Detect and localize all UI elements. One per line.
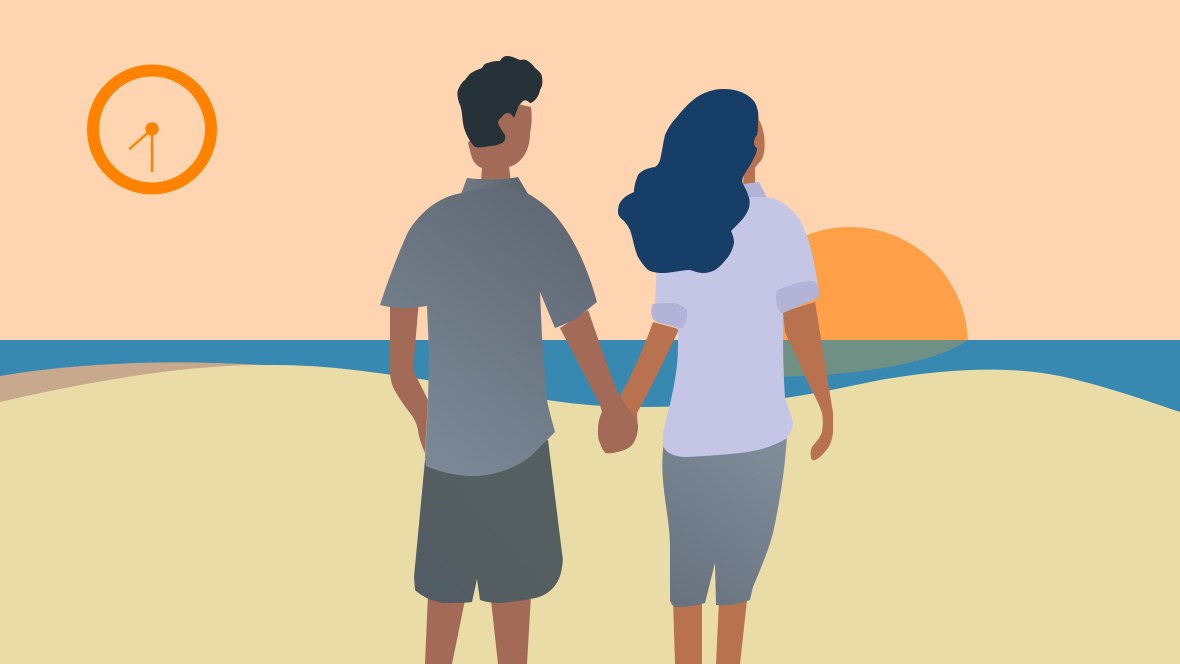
man: [380, 56, 638, 664]
sea: [0, 340, 1180, 430]
sun: [783, 227, 968, 340]
woman face and neck: [743, 108, 765, 186]
woman shirt: [655, 197, 818, 457]
man hair: [457, 56, 542, 147]
sun reflection: [770, 340, 968, 377]
woman left arm: [600, 322, 679, 453]
beach: [0, 365, 1180, 664]
woman right arm: [783, 302, 833, 460]
woman: [600, 89, 833, 664]
woman legs: [673, 600, 747, 664]
man shorts: [414, 440, 563, 603]
clock icon: [93, 70, 211, 188]
woman left sleeve cuff: [651, 303, 687, 328]
woman hair: [618, 89, 758, 273]
man neck and head: [468, 100, 532, 182]
woman right sleeve cuff: [776, 281, 819, 313]
man collar: [461, 177, 528, 194]
man legs: [425, 595, 531, 664]
man shirt: [380, 188, 597, 476]
sky: [0, 0, 1180, 340]
man right arm and hand: [560, 310, 638, 453]
distant sand bank: [0, 362, 290, 404]
woman shirt collar: [743, 182, 767, 198]
woman shorts: [662, 435, 787, 607]
man left arm: [390, 300, 428, 453]
